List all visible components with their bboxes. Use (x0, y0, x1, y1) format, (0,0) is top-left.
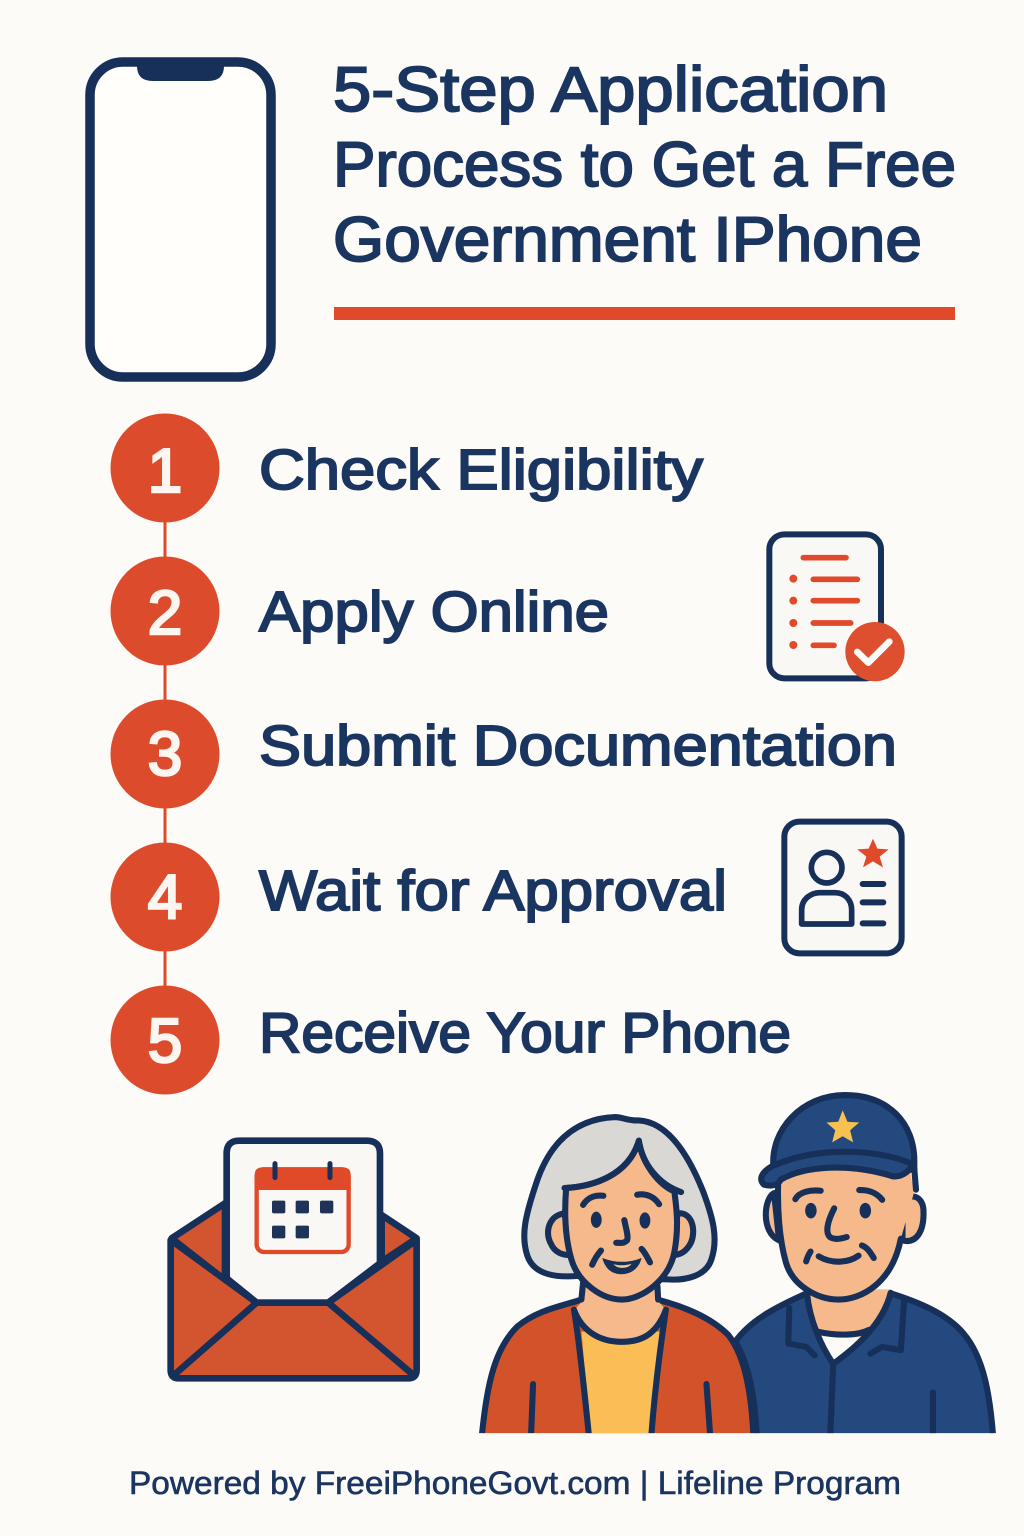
title: 5-Step Application (333, 55, 888, 125)
step connector line (164, 468, 166, 1040)
step 1: Check Eligibility (259, 438, 704, 502)
step 4 (110, 842, 727, 952)
step 2: Apply Online (259, 580, 609, 644)
icon: smartphone outline (90, 62, 271, 377)
title underline (334, 307, 955, 320)
step 3: 3 (148, 720, 182, 789)
footer text: Powered by FreeiPhoneGovt.com | Lifeline Program (129, 1465, 901, 1501)
step list (110, 414, 897, 1094)
step 2: 2 (148, 579, 182, 648)
step 3 (110, 700, 897, 808)
step 5 (110, 986, 791, 1094)
step 1 (110, 414, 704, 522)
icon: ID card with star (784, 822, 902, 953)
illustration: older couple (481, 1095, 994, 1445)
step 2 (110, 556, 609, 666)
title: Government IPhone (333, 205, 922, 275)
step 4: Wait for Approval (259, 859, 727, 923)
man (735, 1095, 994, 1445)
icon: envelope with calendar (171, 1141, 417, 1378)
step 4: 4 (148, 863, 182, 932)
title (333, 55, 956, 275)
title: Process to Get a Free (333, 130, 956, 200)
icon: checklist document (769, 534, 905, 681)
step 1: 1 (148, 437, 182, 506)
step 3: Submit Documentation (259, 714, 897, 778)
step 5: Receive Your Phone (259, 1001, 791, 1065)
step 5: 5 (148, 1007, 182, 1076)
woman (481, 1117, 754, 1445)
